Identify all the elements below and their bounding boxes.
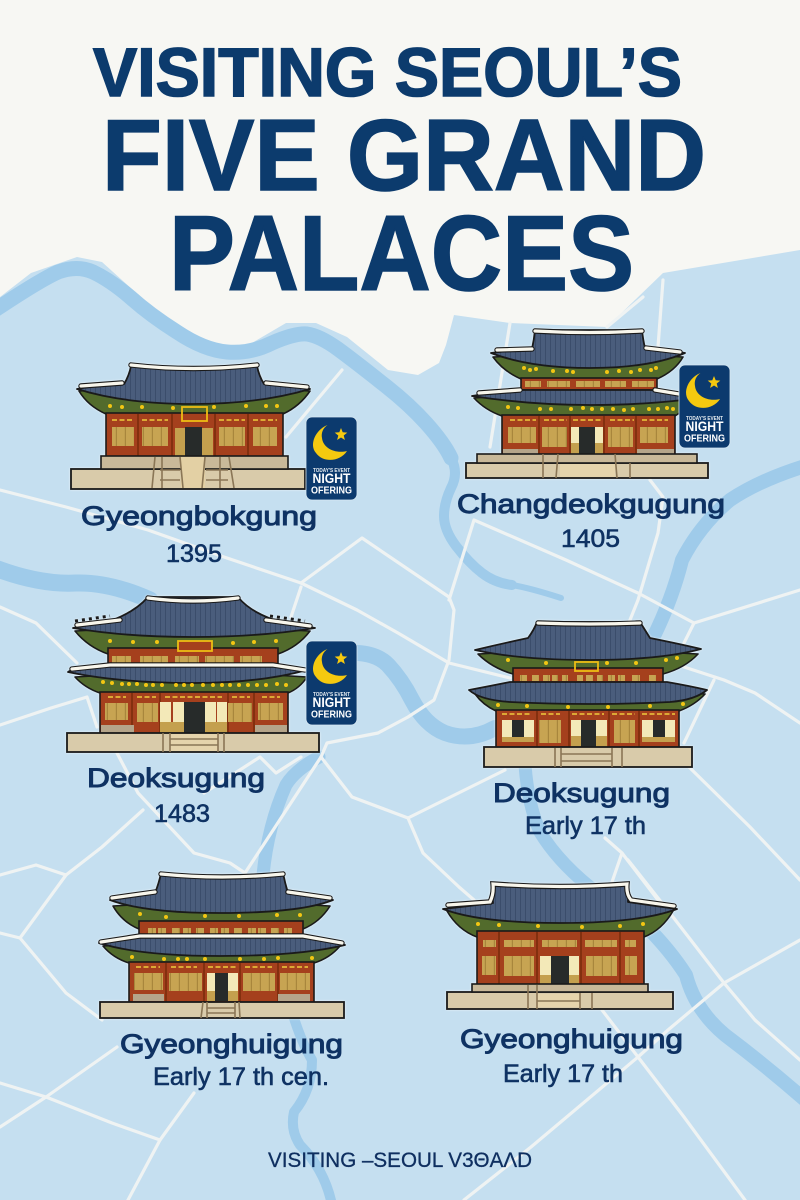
- palace: Gyeongbokgung illustration: [71, 365, 310, 489]
- badge NIGHT: NIGHT: [312, 471, 351, 486]
- date: Early 17 th cen.: Early 17 th cen.: [153, 1063, 329, 1091]
- title line 2: FIVE GRAND: [102, 100, 706, 212]
- label: Changdeokgugung: Changdeokgugung: [457, 489, 725, 519]
- map: road network: [0, 280, 800, 1200]
- icon: crescent moon: [313, 649, 347, 684]
- icon: star: [335, 652, 347, 664]
- footer text: VISITING –SEOUL V3ΘAΛD: [268, 1149, 532, 1172]
- date: 1483: 1483: [154, 800, 210, 828]
- badge small line: TODAY'S EVENT: [686, 416, 724, 422]
- palace: Deoksugung illustration (right): [469, 622, 707, 767]
- night offering badge 3: [306, 641, 357, 725]
- map: land area: [0, 250, 800, 1200]
- palace: Gyeonghuigung illustration (right): [443, 883, 677, 1009]
- date: 1405: 1405: [561, 525, 620, 553]
- badge OFERING: OFERING: [684, 434, 725, 444]
- label: Gyeongbokgung: Gyeongbokgung: [81, 501, 317, 531]
- palace: Deoksugung illustration (left): [67, 597, 319, 752]
- date: Early 17 th right: Early 17 th: [503, 1060, 623, 1088]
- map: rivers: [0, 268, 800, 1200]
- night offering badge 1: [306, 417, 357, 500]
- badge OFERING: OFERING: [311, 710, 352, 720]
- night offering badge 2: [679, 365, 730, 448]
- date: Early 17 th: Early 17 th: [525, 812, 646, 840]
- icon: star: [708, 376, 720, 388]
- badge small line: TODAY'S EVENT: [313, 692, 351, 698]
- title line 3: PALACES: [169, 193, 634, 313]
- date: 1395: 1395: [166, 540, 222, 568]
- badge small line: TODAY'S EVENT: [313, 468, 351, 474]
- palace: Changdeokgung illustration: [466, 330, 708, 478]
- label: Deoksugung right: Deoksugung: [493, 778, 670, 808]
- label: Gyeonghuigung left: Gyeonghuigung: [120, 1029, 343, 1059]
- icon: star: [335, 428, 347, 440]
- label: Deoksugung left: Deoksugung: [87, 763, 265, 793]
- title line 1: VISITING SEOUL’S: [93, 34, 682, 111]
- title: [93, 34, 706, 313]
- label: Gyeonghuigung right: Gyeonghuigung: [460, 1024, 683, 1054]
- badge NIGHT: NIGHT: [686, 419, 724, 434]
- palace: Gyeonghuigung illustration (left): [99, 873, 345, 1018]
- badge NIGHT: NIGHT: [312, 695, 351, 710]
- icon: crescent moon: [313, 425, 347, 460]
- icon: crescent moon: [686, 373, 720, 408]
- badge OFERING: OFERING: [311, 486, 352, 496]
